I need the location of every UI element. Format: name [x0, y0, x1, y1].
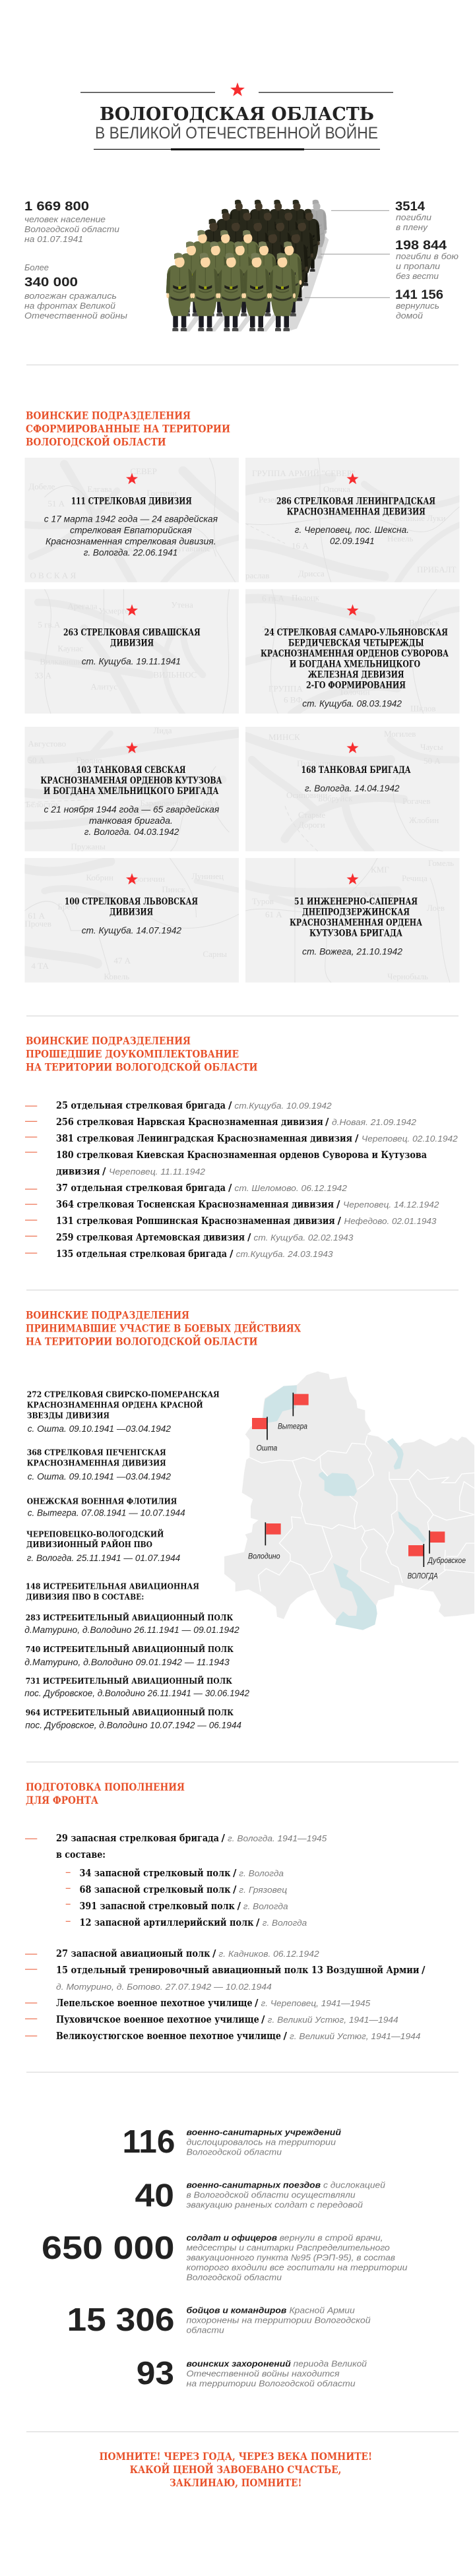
panel: card 286 division: Великие Луки	[394, 513, 445, 523]
panel: card 263 division: Вилкавишкис	[40, 656, 90, 666]
panel: card 100 division: Лунинец	[191, 871, 224, 881]
panel: card 286 division: 286 СТРЕЛКОВАЯ ЛЕНИНГРАДСКАЯ	[276, 496, 435, 506]
panel: card 51 brigade	[245, 858, 460, 983]
icon: star	[346, 473, 359, 484]
panel: card 103 brigade: КРАСНОЗНАМЕНАЯ ОРДЕНОВ КУТУЗОВА	[40, 776, 222, 786]
panel: card 168 brigade: Чаусы	[420, 742, 443, 752]
icon: star	[346, 742, 359, 753]
panel: card 51 brigade: КМГ	[371, 865, 389, 874]
list: front replenishment: г. Череповец, 1941—1945	[261, 1998, 371, 2008]
panel: card 100 division: Прочев	[24, 919, 51, 929]
panel: card 286 division: Дрисса	[298, 568, 325, 578]
panel: card 168 brigade: 168 ТАНКОВАЯ БРИГАДА	[301, 765, 411, 776]
region outline	[224, 1371, 474, 1630]
panel: card 103 brigade: Барановичи	[140, 798, 183, 808]
panel: card 286 division: ГРУППА АРМИЙ "СЕВЕР"	[252, 468, 355, 478]
list: combat units: 964 ИСТРЕБИТЕЛЬНЫЙ АВИАЦИОННЫЙ ПОЛК	[26, 1707, 234, 1717]
flag: Дубровское	[427, 1531, 466, 1565]
flag: Ошта: Ошта	[257, 1443, 278, 1452]
panel: card 111 division: 51 А	[48, 499, 65, 508]
panel: card 263 division: ВИЛЬНЮС	[153, 669, 197, 679]
list: combat units: 731 ИСТРЕБИТЕЛЬНЫЙ АВИАЦИОННЫЙ ПОЛК	[26, 1675, 233, 1686]
list: replenished units: 25 отдельная стрелковая бригада	[56, 1099, 226, 1111]
stat: 15 306 buried: области	[186, 2325, 224, 2335]
list: front replenishment	[25, 1832, 426, 2042]
stat: 15 306 buried: похоронены на территории Вологодской	[186, 2315, 371, 2325]
panel: card 51 brigade: КУТУЗОВА БРИГАДА	[309, 928, 402, 938]
panel: card 51 brigade: Туров	[252, 896, 274, 906]
stat: 650 000 soldiers returned: вернули в строй врачи,	[280, 2232, 383, 2242]
heading: units in combat	[26, 1308, 301, 1348]
panel: card 103 brigade: 103 ТАНКОВАЯ СЕВСКАЯ	[77, 765, 186, 776]
list: front replenishment: 29 запасная стрелковая бригада	[56, 1832, 219, 1844]
stat: 650 000 soldiers returned: эвакуационного пункта №95 (РЭП-95), в состав	[186, 2252, 395, 2262]
list: replenished units: ст. Кущуба. 02.02.1943	[253, 1233, 354, 1242]
panel: card 24 division: Гнезд	[321, 625, 342, 634]
list: front replenishment: г. Вологда	[263, 1918, 307, 1928]
panel: card 24 division: ст. Кущуба. 08.03.1942	[302, 698, 402, 708]
panel: card 51 brigade: ст. Вожега, 21.10.1942	[302, 946, 402, 956]
stats: losses right column: погибли в бою	[396, 251, 459, 261]
list: combat units: 283 ИСТРЕБИТЕЛЬНЫЙ АВИАЦИОННЫЙ ПОЛК	[26, 1612, 234, 1622]
panel: card 263 division: 33 А	[34, 670, 52, 680]
flag: Володино: Володино	[248, 1551, 280, 1560]
list: front replenishment: 391 запасной стрелковый полк	[79, 1900, 235, 1912]
closing quote: ЗАКЛИНАЮ, ПОМНИТЕ!	[170, 2476, 301, 2489]
panel: card 111 division: СЕВЕР	[130, 466, 157, 476]
heading: units in combat: ВОИНСКИЕ ПОДРАЗДЕЛЕНИЯ	[26, 1308, 189, 1322]
list: replenished units: Череповец. 11.11.1942	[109, 1167, 206, 1177]
panel: card 263 division: Укмерге	[98, 605, 129, 615]
panel: card 263 division: Утена	[171, 599, 193, 609]
panel: card 286 division	[242, 458, 463, 583]
list: replenished units: ст. Шеломово. 06.12.1942	[234, 1183, 348, 1193]
panel: card 286 division: Опочка	[323, 484, 350, 494]
panel: card 100 division: Ковель	[104, 971, 129, 981]
list: front replenishment: г. Вологда	[243, 1901, 288, 1911]
closing quote	[99, 2450, 372, 2489]
stat: 93 war graves: 93	[137, 2356, 174, 2391]
panel: card 24 division: ГРУППА	[269, 683, 303, 693]
panel: card 168 brigade: 50 А	[424, 756, 441, 766]
list: combat units: с. Вытегра. 07.08.1941 — 10.07.1944	[28, 1507, 185, 1518]
panel: card 111 division: О В С К А Я	[30, 570, 76, 580]
panel: card 51 brigade: ДНЕПРОДЗЕРЖИНСКАЯ	[302, 907, 410, 917]
list: front replenishment: /	[255, 1997, 259, 2009]
stat: 116 medical institutions	[123, 2124, 341, 2160]
stat: 15 306 buried: Красной Армии	[289, 2305, 355, 2315]
panel: card 100 division: Дрогичин	[129, 874, 165, 884]
list: combat units	[24, 1389, 249, 1731]
heading: front replenishment: ДЛЯ ФРОНТА	[26, 1794, 98, 1806]
panel: card 51 brigade: Мозырь	[364, 890, 393, 900]
panel: card 24 division: ЖЕЛЕЗНАЯ ДЕВИЗИЯ	[308, 669, 404, 680]
heading: replenished units: ВОИНСКИЕ ПОДРАЗДЕЛЕНИЯ	[26, 1034, 191, 1047]
list: combat units: КРАСНОЗНАМЕННАЯ ОРДЕНА КРАСНОЙ	[27, 1399, 203, 1410]
panel: card 24 division: 2-ГО ФОРМИРОВАНИЯ	[306, 680, 406, 690]
panel: card 24 division: БЕРДИЧЕВСКАЯ ЧЕТЫРЕЖДЫ	[288, 638, 424, 648]
stat: 93 war graves: воинских захоронений	[186, 2358, 291, 2368]
heading: formed units: ВОИНСКИЕ ПОДРАЗДЕЛЕНИЯ	[26, 410, 191, 422]
panel: card 263 division: Каунас	[57, 643, 83, 653]
stats: population left column: Более	[24, 262, 49, 272]
list: replenished units: /	[102, 1165, 106, 1177]
stat: 116 medical institutions: военно-санитарных учреждений	[186, 2127, 341, 2137]
stats: losses right column: 3514	[395, 199, 425, 214]
list: replenished units: Нефедово. 02.01.1943	[344, 1216, 437, 1226]
panel: card 103 brigade: И БОГДАНА ХМЕЛЬНИЦКОГО БРИГАДА	[44, 786, 218, 797]
panel: card 168 brigade: Жлобин	[409, 815, 439, 825]
panel: card 51 brigade: Чернобыль	[387, 971, 428, 981]
list: combat units: ЧЕРЕПОВЕЦКО-ВОЛОГОДСКИЙ	[26, 1529, 164, 1539]
panel: card 103 brigade: танковая бригада.	[89, 815, 173, 826]
panel: card 286 division: 16 А	[292, 541, 309, 551]
list: front replenishment: /	[261, 2013, 265, 2025]
panel: card 168 brigade: Рогачев	[402, 796, 430, 806]
icon: star	[126, 742, 138, 753]
list: replenished units	[25, 1099, 459, 1260]
list: combat units: с. Ошта. 09.10.1941 —03.04.1942	[28, 1471, 171, 1481]
heading: units in combat: ПРИНИМАВШИЕ УЧАСТИЕ В БОЕВЫХ ДЕЙСТВИЯХ	[26, 1320, 301, 1335]
stats: losses right column: погибли	[396, 212, 431, 222]
panel: card 168 brigade: Дороги	[298, 820, 325, 830]
panel: card 24 division: 6 ВФ	[284, 694, 303, 704]
list: front replenishment: Великоустюгское военное пехотное училище	[56, 2030, 281, 2042]
panel: card 286 division: г. Череповец, пос. Шексна.	[295, 524, 409, 535]
panel: card 168 brigade: Пуховичи	[297, 758, 333, 768]
stat: 40 medical trains: эвакуацию раненых солдат с передовой	[186, 2199, 363, 2209]
list: combat units: КРАСНОЗНАМЕННАЯ ДИВИЗИЯ	[27, 1457, 166, 1468]
icon: star	[346, 873, 359, 884]
flag: Вологда: ВОЛОГДА	[408, 1571, 438, 1580]
list: combat units: ЗВЕЗДЫ ДИВИЗИЯ	[27, 1411, 110, 1421]
list: front replenishment: Лепельское военное пехотное училище	[56, 1997, 253, 2009]
list: front replenishment: д. Мотурино, д. Ботово. 27.07.1942 — 10.02.1944	[56, 1982, 272, 1992]
list: replenished units: дивизия	[56, 1165, 100, 1177]
list: combat units: пос. Дубровское, д.Володино 10.07.1942 — 06.1944	[25, 1720, 241, 1731]
panel: card 111 division: Елгава	[87, 484, 112, 494]
subtitle: В ВЕЛИКОЙ ОТЕЧЕСТВЕННОЙ ВОЙНЕ	[95, 123, 378, 142]
heading: formed units: ВОЛОГОДСКОЙ ОБЛАСТИ	[26, 435, 166, 448]
panel: card 24 division: Витебск	[409, 617, 439, 627]
panel: card 168 brigade: г. Вологда. 14.04.1942	[305, 783, 400, 793]
stats: population left column	[24, 199, 127, 321]
heading: replenished units: ПРОШЕДШИЕ ДОУКОМПЛЕКТОВАНИЕ	[26, 1047, 239, 1060]
list: combat units: 740 ИСТРЕБИТЕЛЬНЫЙ АВИАЦИОННЫЙ ПОЛК	[26, 1643, 234, 1654]
list: front replenishment: /	[238, 1900, 241, 1912]
stat: 650 000 soldiers returned: которого входили все госпитали на территории	[186, 2262, 408, 2272]
stat: 116 medical institutions: 116	[123, 2124, 175, 2160]
panel: card 263 division: ст. Кущуба. 19.11.1941	[82, 656, 181, 666]
panel: card 111 division: Добеле	[28, 481, 55, 491]
list: replenished units: ст.Кущуба. 24.03.1943	[236, 1249, 333, 1259]
heading: replenished units: НА ТЕРИТОРИИ ВОЛОГОДСКОЙ ОБЛАСТИ	[26, 1059, 257, 1074]
panel: card 51 brigade: Лоев	[427, 903, 445, 913]
stats: losses right column: 198 844	[395, 238, 447, 253]
list: combat units: с. Ошта. 09.10.1941 —03.04.1942	[28, 1423, 171, 1434]
panel: card 103 brigade: с 21 ноября 1944 года — 65 гвардейская	[44, 804, 220, 814]
list: combat units: ОНЕЖСКАЯ ВОЕННАЯ ФЛОТИЛИЯ	[27, 1496, 177, 1506]
panel: card 286 division: 02.09.1941	[330, 536, 375, 546]
list: replenished units: Череповец. 02.10.1942	[362, 1134, 459, 1144]
panel: card 286 division: ПРИБАЛТ	[417, 565, 457, 574]
panel: card 100 division: 47 А	[113, 956, 131, 966]
panel: card 24 division: Толочин	[339, 687, 369, 696]
panel: card 286 division: Резекне	[259, 495, 287, 505]
stats: population left column: на 01.07.1941	[24, 234, 83, 244]
stat: 650 000 soldiers returned: Вологодской области	[186, 2272, 282, 2282]
panel: card 103 brigade	[24, 725, 239, 852]
panel: card 168 brigade: Бобруйск	[318, 793, 353, 803]
list: front replenishment: г. Великий Устюг, 1941—1944	[290, 2031, 420, 2041]
flag: Вологда	[408, 1544, 438, 1580]
flag: Ошта	[252, 1417, 278, 1452]
list: replenished units: ст.Кущуба. 10.09.1942	[234, 1101, 332, 1111]
stat: 15 306 buried: 15 306	[67, 2302, 174, 2338]
heading: front replenishment: ПОДГОТОВКА ПОПОЛНЕНИЯ	[26, 1781, 185, 1793]
stat: 650 000 soldiers returned: медсестры и санитарки Распределительного	[186, 2242, 390, 2252]
list: front replenishment: Пуховичское военное пехотное училище	[56, 2013, 259, 2025]
list: combat units: д.Матурино, д.Володино 09.01.1942 — 11.1943	[24, 1657, 230, 1667]
stat: 93 war graves: Отечественной войны находится	[186, 2368, 340, 2378]
panel: card 286 division: КРАСНОЗНАМЕННАЯ ДЕВИЗИЯ	[287, 506, 426, 517]
panel: card 103 brigade: Лида	[153, 725, 172, 735]
stats: losses right column: вернулись	[396, 301, 439, 311]
panel: card 263 division: 263 СТРЕЛКОВАЯ СИВАШСКАЯ	[63, 627, 201, 638]
stats: population left column: вологжан сражались	[24, 291, 117, 301]
panel: card 24 division: И БОГДАНА ХМЕЛЬНИЦКОГО	[290, 659, 420, 669]
panel: card 100 division	[21, 858, 242, 983]
stats: population left column: Вологодской области	[24, 224, 119, 234]
panel: card 100 division: 100 СТРЕЛКОВАЯ ЛЬВОВСКАЯ	[65, 896, 198, 907]
panel: card 24 division	[245, 589, 463, 714]
stats: losses right column: без вести	[396, 271, 439, 281]
panel: card 168 brigade: Осиповичи	[286, 790, 327, 800]
panel: card 100 division: Брест	[57, 902, 79, 911]
heading: units in combat: НА ТЕРИТОРИИ ВОЛОГОДСКОЙ ОБЛАСТИ	[26, 1334, 257, 1348]
stats: population left column: 340 000	[24, 275, 78, 290]
panel: card 286 division: раслав	[245, 570, 269, 580]
panel: card 168 brigade: МИНСК	[269, 732, 300, 742]
panel: card 100 division: 61 А	[28, 911, 46, 921]
heading: front replenishment	[26, 1781, 185, 1806]
panel: card 263 division: 5 гв.А	[38, 619, 61, 629]
stat: 40 medical trains	[135, 2178, 385, 2214]
heading: formed units: СФОРМИРОВАННЫЕ НА ТЕРИТОРИИ	[26, 423, 230, 435]
header: title block	[80, 82, 393, 150]
list: combat units: г. Вологда. 25.11.1941 — 01.07.1944	[27, 1552, 181, 1563]
stats: losses right column	[305, 199, 459, 321]
panel: card 263 division	[24, 589, 239, 714]
panel: card 100 division: ДИВИЗИЯ	[110, 907, 153, 917]
list: replenished units: /	[230, 1248, 234, 1260]
list: combat units: пос. Дубровское, д.Володино 26.11.1941 — 30.06.1942	[24, 1688, 249, 1698]
panel: card 111 division: с 17 марта 1942 года — 24 гвардейская	[44, 514, 218, 524]
list: front replenishment: 15 отдельный тренировочный авиационный полк 13 Воздушной Армии	[56, 1964, 420, 1976]
list: front replenishment: /	[233, 1884, 237, 1895]
list: front replenishment: г. Грязовец	[239, 1885, 287, 1895]
heading: formed units	[26, 410, 230, 448]
panel: card 100 division: ст. Кущуба. 14.07.1942	[82, 925, 181, 935]
flag: Вытегра: Вытегра	[278, 1422, 307, 1431]
panel: card 168 brigade	[245, 727, 460, 852]
panel: card 51 brigade: Речица	[402, 873, 428, 883]
stat: 650 000 soldiers returned: солдат и офицеров	[186, 2232, 277, 2242]
stat: 40 medical trains: с дислокацией	[323, 2180, 385, 2190]
list: replenished units: /	[336, 1198, 340, 1210]
panel: card 111 division: Гостини	[146, 488, 177, 498]
list: replenished units: /	[247, 1231, 251, 1243]
stats: population left column: Отечественной войны	[24, 311, 127, 321]
stats: losses right column: в плену	[396, 222, 429, 232]
list: front replenishment: г. Вологда	[239, 1868, 284, 1878]
list: replenished units: Череповец. 14.12.1942	[343, 1200, 439, 1210]
panel: card 263 division: ДИВИЗИЯ	[110, 638, 154, 648]
stat: 40 medical trains: 40	[135, 2178, 174, 2214]
panel: card 111 division: г. Вологда. 22.06.1941	[84, 547, 177, 558]
list: replenished units: д.Новая. 21.09.1942	[332, 1117, 417, 1127]
stat: 15 306 buried	[67, 2302, 371, 2338]
stats: losses right column: и пропали	[396, 261, 440, 271]
panel: card 51 brigade: КРАСНОЗНАМЕННАЯ ОРДЕНА	[290, 917, 422, 928]
panel: card 24 division: 6 гв.А	[262, 593, 284, 603]
heading: replenished units	[26, 1034, 257, 1074]
panel: card 103 brigade: 65 А	[203, 799, 220, 809]
list: replenished units: /	[325, 1116, 329, 1128]
list: front replenishment: г. Кадников. 06.12.1942	[218, 1949, 320, 1959]
list: combat units: ДИВИЗИОННЫЙ РАЙОН ПВО	[26, 1539, 152, 1549]
list: front replenishment: 68 запасной стрелковый полк	[79, 1884, 231, 1895]
list: replenished units: 131 стрелковая Ропшинская Краснознаменная дивизия	[56, 1215, 335, 1227]
panel: card 103 brigade: 50 А	[28, 755, 46, 765]
list: replenished units: /	[355, 1132, 359, 1144]
stat: 93 war graves: периода Великой	[293, 2358, 367, 2368]
list: front replenishment: /	[233, 1867, 237, 1879]
list: combat units: 272 СТРЕЛКОВАЯ СВИРСКО-ПОМЕРАНСКАЯ	[27, 1389, 220, 1399]
flag: Володино	[248, 1522, 281, 1560]
panel: card 100 division: Пинск	[162, 884, 185, 894]
stat: 116 medical institutions: Вологодской области	[186, 2147, 282, 2157]
list: replenished units: 259 стрелковая Артемовская дивизия	[56, 1231, 245, 1243]
panel: card 51 brigade: Гомель	[428, 858, 454, 868]
panel: card 111 division: Даугавпилс	[168, 543, 211, 553]
panel: card 103 brigade: Августово	[28, 739, 66, 749]
panel: card 263 division: Алитус	[90, 681, 117, 691]
panel: card 103 brigade: Белосток	[26, 799, 60, 809]
icon: star	[346, 604, 359, 615]
panel: card 111 division: Краснознаменная стрелковая дивизия.	[46, 536, 216, 547]
list: front replenishment: 27 запасной авиационый полк	[56, 1947, 210, 1959]
illustration: rows of soldiers	[166, 200, 329, 332]
stats: population left column: на фронтах Великой	[24, 301, 115, 311]
list: combat units: 148 ИСТРЕБИТЕЛЬНАЯ АВИАЦИОННАЯ	[26, 1581, 199, 1591]
lakes	[263, 1386, 426, 1630]
panel: card 111 division: Паневежис	[100, 543, 141, 553]
panel: card 111 division: 111 СТРЕЛКОВАЯ ДИВИЗИЯ	[71, 496, 192, 506]
stat: 93 war graves	[137, 2356, 367, 2391]
stats: population left column: 1 669 800	[24, 199, 89, 214]
panel: card 111 division: стрелковая Евпаторийская	[70, 525, 192, 536]
list: replenished units: 37 отдельная стрелковая бригада	[56, 1182, 226, 1194]
panel: card 100 division: Сарны	[203, 949, 227, 959]
list: replenished units: 364 стрелковая Тосненская Краснознаменная дивизия	[56, 1198, 334, 1210]
closing quote: ПОМНИТЕ! ЧЕРЕЗ ГОДА, ЧЕРЕЗ ВЕКА ПОМНИТЕ!	[99, 2450, 372, 2463]
list: replenished units: /	[228, 1099, 232, 1111]
icon: red star	[230, 82, 245, 96]
panel: card 24 division: 2 гв.А Глубокое	[262, 624, 320, 634]
list: combat units: 368 СТРЕЛКОВАЯ ПЕЧЕНГСКАЯ	[27, 1447, 166, 1457]
list: replenished units: 135 отдельная стрелковая бригада	[56, 1248, 227, 1260]
flag: Дубровское: Дубровское	[427, 1556, 466, 1565]
panel: card 263 division: Швенчен	[153, 627, 187, 637]
icon: star	[126, 873, 138, 884]
icon: star	[126, 604, 138, 615]
panel: card 51 brigade: 51 ИНЖЕНЕРНО-САПЕРНАЯ	[294, 896, 418, 907]
list: replenished units: /	[228, 1182, 232, 1194]
district borders	[249, 1436, 474, 1591]
panel: card 103 brigade: г. Вологда. 04.03.1942	[84, 826, 179, 837]
panel: card 263 division: Арегала	[67, 601, 98, 611]
list: front replenishment: г. Великий Устюг, 1941—1944	[268, 2015, 398, 2025]
list: front replenishment: 34 запасной стрелковый полк	[79, 1867, 231, 1879]
list: front replenishment: /	[212, 1947, 216, 1959]
stats: losses right column: домой	[396, 311, 423, 321]
panel: card 168 brigade: Могилев	[384, 729, 416, 739]
list: combat units: ДИВИЗИЯ ПВО В СОСТАВЕ:	[26, 1592, 144, 1602]
stat: 40 medical trains: в Вологодской области осуществляли	[186, 2190, 356, 2199]
closing quote: КАКОЙ ЦЕНОЙ ЗАВОЕВАНО СЧАСТЬЕ,	[130, 2462, 341, 2476]
stat: 15 306 buried: бойцов и командиров	[186, 2305, 286, 2315]
panel: card 168 brigade: Старые	[298, 810, 325, 820]
panel: card 24 division: Шклов	[410, 703, 436, 713]
list: front replenishment: /	[222, 1832, 226, 1844]
panel: card 111 division	[18, 458, 249, 590]
map: Vologda region with flags	[224, 1371, 474, 1630]
list: front replenishment: в составе:	[56, 1849, 106, 1860]
stat: 93 war graves: на территории Вологодской области	[186, 2378, 356, 2388]
panel: card 286 division: Невель	[387, 534, 413, 543]
icon: star	[126, 473, 138, 484]
list: replenished units: /	[338, 1215, 342, 1227]
stat: 650 000 soldiers returned	[42, 2230, 408, 2282]
panel: card 100 division: Кобрин	[86, 873, 113, 882]
list: replenished units: 381 стрелковая Ленинградская Краснознаменная дивизия	[56, 1132, 352, 1144]
list: front replenishment: г. Вологда. 1941—1945	[228, 1833, 327, 1843]
stats: losses right column: 141 156	[395, 288, 443, 302]
panel: card 100 division: 4 ТА	[31, 961, 49, 971]
flag: Вытегра	[278, 1393, 309, 1431]
list: front replenishment: 12 запасной артиллерийский полк	[79, 1917, 254, 1928]
panel: card 103 brigade: Пружаны	[71, 842, 106, 851]
stats: population left column: человек население	[24, 214, 106, 224]
panel: card 24 division: Полоцк	[292, 592, 320, 602]
panel: card 103 brigade: Гродно	[76, 755, 102, 765]
list: replenished units: 256 стрелковая Нарвская Краснознаменная дивизия	[56, 1116, 323, 1128]
list: combat units: д.Матурино, д.Володино 26.11.1941 — 09.01.1942	[24, 1624, 239, 1635]
title: ВОЛОГОДСКАЯ ОБЛАСТЬ	[100, 104, 374, 125]
list: front replenishment: /	[256, 1917, 260, 1928]
panel: card 51 brigade: 61 А	[265, 909, 282, 919]
stat: 116 medical institutions: дислоцировалось на территории	[186, 2137, 336, 2147]
list: front replenishment: /	[422, 1964, 426, 1976]
stat: 650 000 soldiers returned: 650 000	[42, 2230, 174, 2266]
list: front replenishment: /	[284, 2030, 288, 2042]
stat: 40 medical trains: военно-санитарных поездов	[186, 2180, 321, 2190]
